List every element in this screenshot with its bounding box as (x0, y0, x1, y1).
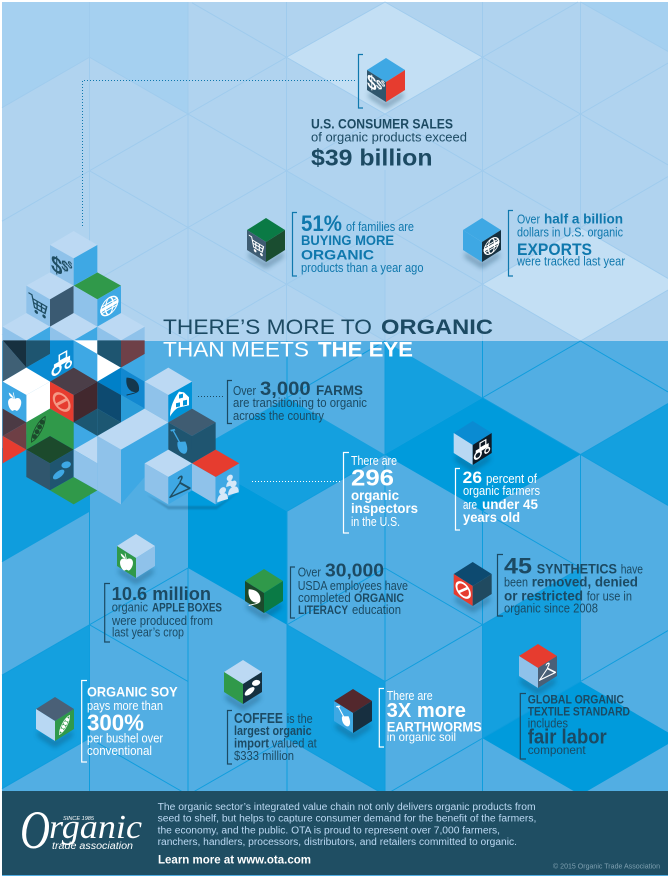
stat: organic soy (82, 680, 178, 762)
stat: 51% of families: BUYING MORE (301, 232, 394, 248)
logo: Organic Trade Association (20, 800, 142, 860)
stat: 45 synthetics: removed, denied (532, 574, 638, 590)
stat: coffee: is the (287, 712, 313, 726)
stat: 26 percent (456, 468, 540, 530)
stat: 26 percent: 26 (463, 468, 482, 487)
stat: earthworms: in organic soil (387, 730, 456, 744)
logo: Organic Trade Association: O (20, 800, 50, 860)
copyright: © 2015 Organic Trade Association (553, 861, 660, 870)
stat: textile standard: component (528, 743, 586, 757)
stat: 26 percent: percent of (486, 472, 537, 486)
pile: faces below the divider (3, 340, 239, 504)
pile: tractor icon (53, 349, 71, 376)
stat: 3,000 farms: across the country (233, 409, 325, 423)
stat: 30,000 USDA employees: Over (298, 566, 321, 580)
stat: textile standard (520, 693, 630, 759)
icon cube: shovel (334, 689, 372, 739)
stat: 45 synthetics: 45 (504, 553, 532, 578)
stat: 3,000 farms: are transitioning to organic (233, 396, 367, 410)
pile: coffee beans icon (52, 457, 72, 482)
pile: cart icon (28, 293, 47, 320)
stat: 30,000 USDA employees: ORGANIC (354, 591, 404, 605)
stat: 3,000 farms: Over (233, 384, 256, 398)
stat: coffee: $333 million (234, 749, 294, 763)
stat: 3,000 farms (198, 379, 367, 424)
stat: exports (508, 210, 625, 276)
stat: coffee (228, 710, 317, 764)
stat: 30,000 USDA employees: education (352, 603, 401, 617)
stat: 51% of families: 51% (301, 211, 342, 236)
pile: apple icon (8, 392, 21, 411)
stat: 45 synthetics (498, 553, 643, 616)
stat: earthworms: EARTHWORMS (387, 720, 482, 735)
icon cube: coffee (224, 660, 262, 710)
learn more link text: Learn more at www.ota.com (158, 854, 311, 866)
pile: barn icon (170, 389, 189, 417)
stat: 45 synthetics: been (504, 576, 528, 590)
logo: Organic Trade Association: trade association (52, 841, 133, 852)
stat: 10.6 million apple boxes: organic (112, 601, 148, 615)
icon cube: sales: $ (381, 78, 385, 90)
stat: U.S. consumer sales: $39 billion (311, 145, 432, 171)
stat: coffee: valued at (272, 737, 317, 751)
stat: 45 synthetics: SYNTHETICS (537, 560, 617, 576)
logo: Organic Trade Association: rganic (49, 809, 142, 846)
pile: dollar signs icon: $ (61, 257, 68, 277)
stat: 296 inspectors: 296 (351, 465, 394, 491)
stat: coffee: COFFEE (234, 710, 283, 727)
stat: 10.6 million apple boxes (105, 584, 222, 642)
footer description: seed to shelf, but helps to capture consumer demand for the benefit of the farmers, (158, 814, 536, 825)
stat: earthworms (379, 688, 482, 747)
stat: exports: half a billion (544, 210, 623, 226)
stat: 45 synthetics: have (621, 562, 643, 576)
icon cube: sales: $ (367, 69, 377, 97)
icon cube: tractor (454, 421, 492, 471)
pile: dollar signs icon: $ (51, 249, 62, 281)
stat: 30,000 USDA employees (290, 561, 408, 618)
stat: organic soy: 300% (87, 710, 144, 736)
stat: 51% of families: of families are (346, 220, 414, 234)
stat: 30,000 USDA employees: USDA employees have (298, 579, 408, 593)
stat: coffee: largest organic (234, 724, 312, 738)
stat: 296 inspectors: organic (351, 487, 399, 503)
stat: exports: EXPORTS (517, 240, 592, 259)
pile: no-entry icon (54, 391, 69, 413)
stat: 296 inspectors: in the U.S. (351, 515, 400, 529)
footer description (158, 802, 536, 848)
pile: shovel icon (171, 428, 187, 455)
icon cube: hanger (519, 644, 557, 694)
footer description: The organic sector’s integrated value chain not only delivers organic products from (158, 802, 536, 813)
stat: 45 synthetics: or restricted (504, 588, 583, 604)
stat: 10.6 million apple boxes: were produced from (111, 614, 213, 628)
stat: 26 percent: organic farmers (463, 484, 540, 498)
stat: coffee: import (234, 737, 270, 751)
stat: 296 inspectors: inspectors (351, 500, 418, 516)
pile: hanger icon (170, 472, 190, 497)
stat: 26 percent: years old (463, 509, 520, 525)
stat: exports: Over (517, 212, 540, 226)
stat: exports: dollars in U.S. organic (517, 226, 623, 240)
stat: 296 inspectors: There are (351, 454, 397, 468)
stat: organic soy: ORGANIC SOY (87, 684, 178, 700)
pile: leaf icon (126, 378, 139, 395)
icon cube: soy (36, 697, 74, 747)
icon cube: no sign (454, 562, 492, 612)
stat: organic soy: conventional (87, 744, 152, 758)
pile: dollar signs icon (51, 249, 73, 281)
logo: Organic Trade Association: SINCE 1985 (63, 816, 95, 822)
icon cube: apple (117, 534, 155, 584)
title: THERE’S MORE TO (163, 315, 372, 339)
title: THE EYE (318, 338, 413, 362)
pile: faces above the divider (3, 231, 145, 340)
footer band (2, 791, 668, 875)
icon cube: sales: $ (376, 76, 382, 94)
stat: 26 percent: under 45 (482, 496, 538, 512)
stat: exports: were tracked last year (516, 255, 625, 269)
stat: 10.6 million apple boxes: 10.6 million (112, 584, 211, 604)
stat: U.S. consumer sales: of organic products exceed (311, 130, 467, 145)
stat: 30,000 USDA employees: 30,000 (325, 561, 384, 581)
stat: 45 synthetics: for use in (587, 590, 632, 604)
icon cube: cart (247, 218, 285, 268)
stat: 10.6 million apple boxes: last year’s crop (112, 626, 184, 640)
pile: globe icon (100, 292, 118, 320)
cube pile illustration (3, 231, 239, 509)
stat: 296 inspectors (252, 452, 418, 533)
stat: U.S. consumer sales: U.S. CONSUMER SALES (311, 117, 453, 132)
footer description: ranchers, handlers, processors, distributors, and retailers committed to organic. (158, 837, 517, 848)
icon cube: sales (367, 58, 405, 108)
stat: textile standard: includes (528, 717, 568, 731)
stat: earthworms: There are (387, 689, 433, 703)
stat: organic soy: pays more than (87, 699, 163, 713)
title (163, 315, 493, 362)
stat: 51% of families: products than a year ago (301, 261, 424, 275)
stat: 10.6 million apple boxes: APPLE BOXES (152, 601, 222, 615)
stat: 3,000 farms: 3,000 (260, 379, 311, 400)
icon cube: leaf (245, 569, 283, 619)
pile: soy pod icon (29, 415, 48, 444)
pile: people icon (217, 472, 239, 502)
stat: 3,000 farms: FARMS (316, 382, 363, 398)
title: ORGANIC (381, 315, 493, 339)
stat: 30,000 USDA employees: LITERACY (298, 603, 348, 617)
footer description: the economy, and the public. OTA is proud to represent over 7,000 farmers, (158, 825, 500, 836)
stat: 26 percent: are (463, 498, 477, 512)
dotted connector from sales cube to pile (82, 80, 355, 228)
stat: 51% of families: ORGANIC (301, 247, 374, 263)
stat: 45 synthetics: organic since 2008 (504, 602, 598, 616)
stat: organic soy: per bushel over (87, 732, 163, 746)
stat: earthworms: 3X more (387, 700, 466, 722)
stat: U.S. consumer sales (311, 54, 467, 171)
stat: 30,000 USDA employees: completed (298, 591, 351, 605)
stat: textile standard: fair labor (528, 727, 607, 749)
stat: textile standard: GLOBAL ORGANIC (528, 693, 624, 707)
icon cube: exports (463, 218, 501, 268)
pile: dollar signs icon: $ (68, 259, 73, 273)
title: THAN MEETS (163, 338, 309, 362)
stat: textile standard: TEXTILE STANDARD (528, 705, 630, 719)
stat: 51% of families (292, 211, 424, 276)
